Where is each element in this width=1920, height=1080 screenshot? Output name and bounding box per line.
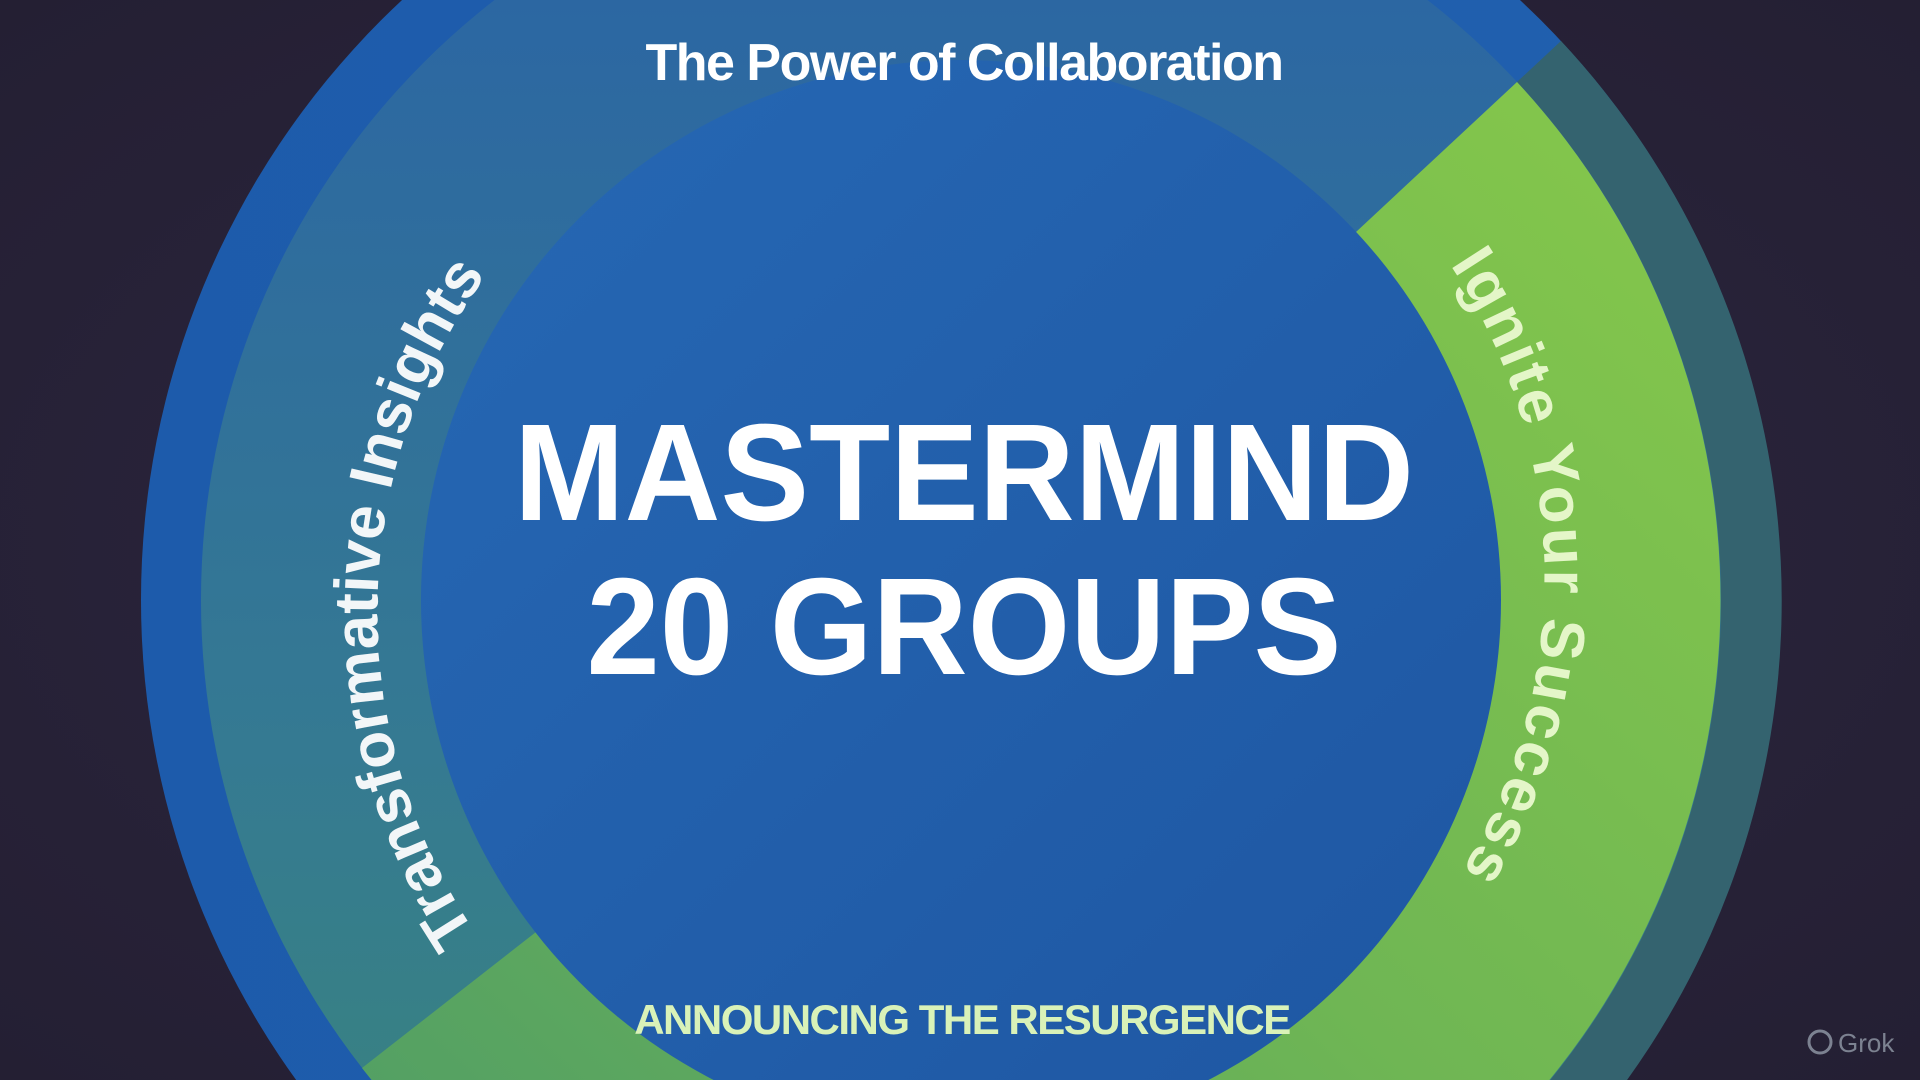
watermark xyxy=(1809,1028,1895,1058)
main heading xyxy=(514,396,1414,704)
middle ring xyxy=(201,0,1721,1080)
green segment xyxy=(362,82,1720,1080)
watermark: Grok xyxy=(1838,1028,1895,1058)
title: The Power of Collaboration xyxy=(645,34,1283,92)
main heading: MASTERMIND xyxy=(514,396,1414,550)
subtitle: ANNOUNCING THE RESURGENCE xyxy=(634,996,1290,1043)
main heading: 20 GROUPS xyxy=(586,550,1342,704)
curved text: Transformative Insights: Transformative Insights xyxy=(332,263,481,956)
outer ring right segment xyxy=(818,41,1782,1080)
inner circle xyxy=(421,60,1501,1080)
curved text: Ignite Your Success: Ignite Your Success xyxy=(1452,244,1585,881)
